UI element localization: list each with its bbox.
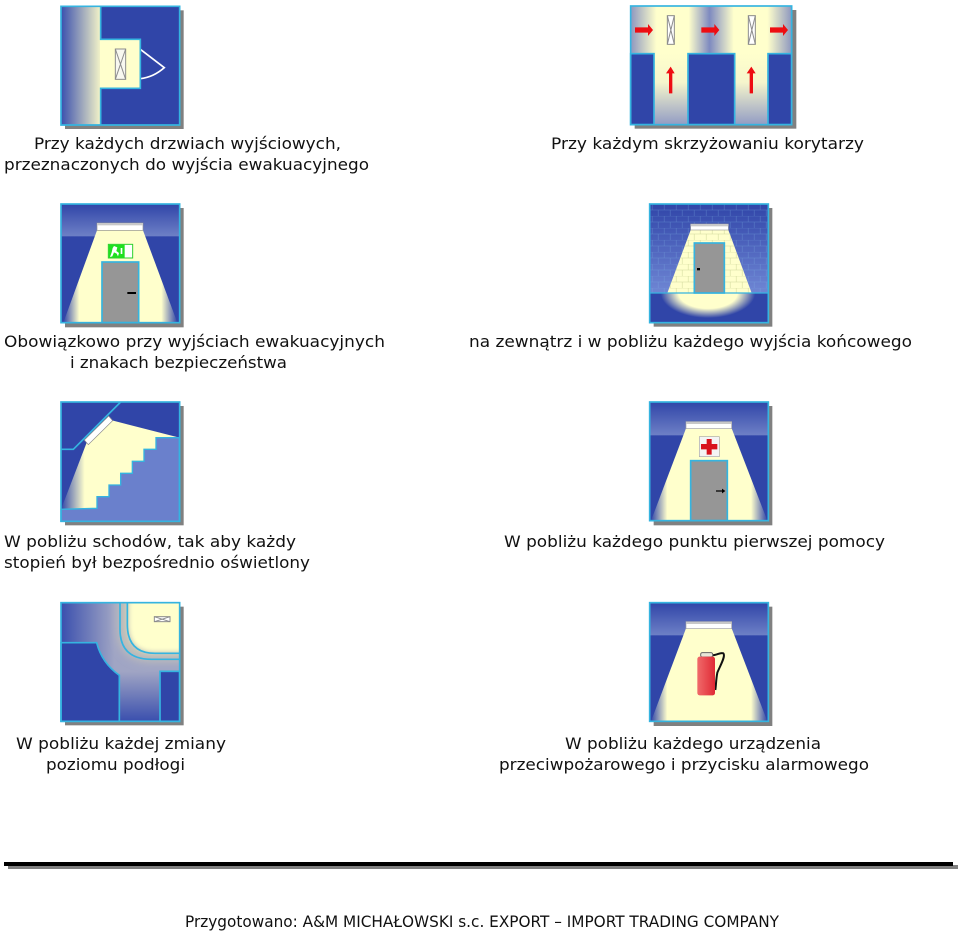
- door swing: [140, 49, 164, 79]
- luminaires: [667, 16, 755, 44]
- footer rule: [4, 862, 958, 869]
- caption: corridor crossings: Przy każdym skrzyżowaniu korytarzy: [551, 134, 864, 153]
- caption: exit doors: przeznaczonych do wyjścia ewakuacyjnego: [4, 155, 369, 174]
- ceiling line: [61, 402, 121, 449]
- panel: stairs: [61, 402, 184, 525]
- caption: mandatory exits: Obowiązkowo przy wyjściach ewakuacyjnych: [4, 332, 385, 351]
- wall blocks: [61, 643, 180, 721]
- light on wall: [667, 230, 752, 293]
- door handle: [697, 268, 700, 270]
- panel: exit door: [61, 6, 184, 129]
- fire extinguisher: [697, 653, 724, 695]
- luminaire: [84, 416, 113, 445]
- door: [694, 243, 724, 293]
- light beam: [61, 420, 179, 509]
- exit sign: [108, 244, 133, 258]
- luminaire: [115, 49, 126, 79]
- caption: fire equipment: przeciwpożarowego i przycisku alarmowego: [499, 755, 869, 774]
- caption: floor level: W pobliżu każdej zmiany: [16, 734, 226, 753]
- caption: mandatory exits: [4, 332, 385, 372]
- luminaire: [154, 617, 170, 622]
- caption: fire equipment: W pobliżu każdego urządzenia: [565, 734, 821, 753]
- caption: exit doors: [4, 134, 369, 174]
- panel: first aid point: [650, 402, 772, 525]
- panel: outside final exit: [650, 204, 772, 327]
- light beam: [651, 428, 767, 521]
- light pool: [662, 294, 754, 318]
- first aid sign: [699, 437, 719, 457]
- door: [691, 461, 727, 521]
- caption: fire equipment: [499, 734, 869, 774]
- light beam: [651, 628, 767, 721]
- corridor gradient: [61, 6, 101, 125]
- panel: floor level change: [61, 596, 190, 725]
- caption: final exit: na zewnątrz i w pobliżu każdego wyjścia końcowego: [469, 332, 912, 351]
- footer text: Przygotowano: A&M MICHAŁOWSKI s.c. EXPORT – IMPORT TRADING COMPANY: [185, 912, 779, 931]
- luminaire: [691, 224, 728, 230]
- caption: mandatory exits: i znakach bezpieczeństwa: [70, 353, 287, 372]
- caption: floor level: poziomu podłogi: [46, 755, 185, 774]
- floor: [650, 293, 768, 323]
- step lines: [120, 603, 180, 659]
- wall blocks: [631, 54, 792, 125]
- caption: first aid: W pobliżu każdego punktu pierwszej pomocy: [504, 532, 885, 551]
- panel outline: [61, 6, 180, 125]
- lit door recess: [100, 39, 140, 88]
- luminaire: [686, 622, 732, 629]
- luminaire: [97, 223, 143, 230]
- lower corridor: [119, 671, 160, 721]
- lit area: [115, 604, 179, 664]
- caption: floor level: [16, 734, 226, 774]
- panel: exit with safety sign: [61, 204, 184, 327]
- door: [102, 262, 139, 323]
- light beam: [63, 230, 177, 323]
- panel: corridor crossings: [631, 6, 796, 129]
- lower corridors: [654, 54, 688, 125]
- door handle: [716, 489, 725, 493]
- luminaire: [686, 422, 732, 429]
- caption: stairs: [4, 532, 310, 572]
- door handle: [127, 292, 136, 294]
- caption: exit doors: Przy każdych drzwiach wyjściowych,: [34, 134, 341, 153]
- caption: stairs: W pobliżu schodów, tak aby każdy: [4, 532, 296, 551]
- caption: stairs: stopień był bezpośrednio oświetlony: [4, 553, 310, 572]
- panel: fire equipment: [650, 603, 772, 726]
- steps: [61, 438, 179, 521]
- red arrows: [635, 24, 788, 93]
